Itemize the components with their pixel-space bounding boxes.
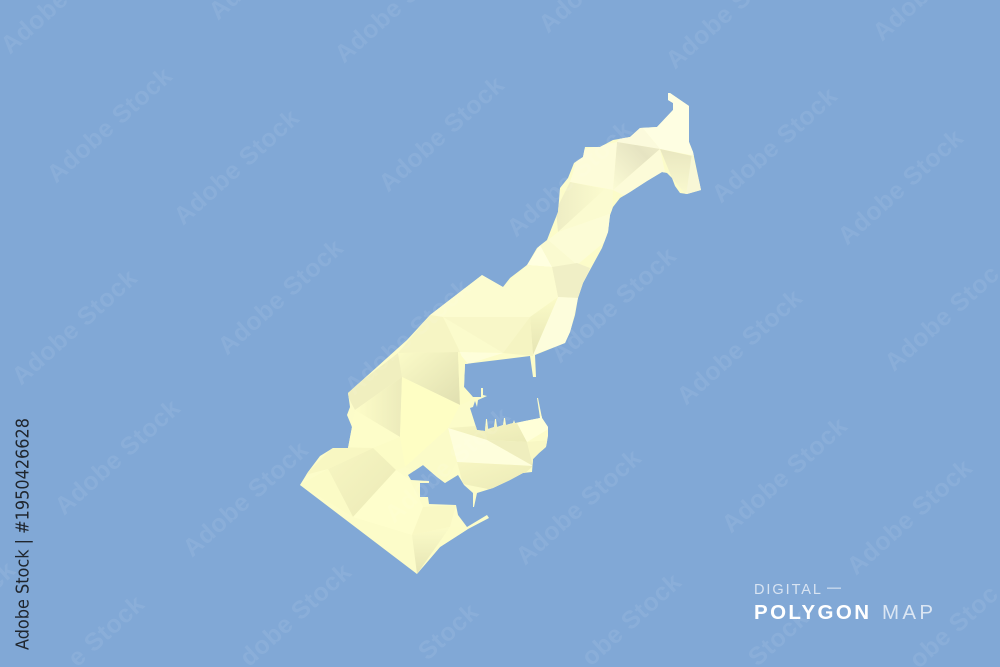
Adobe Stock watermarks: Adobe Stock (49, 394, 186, 520)
southern facets (300, 352, 550, 576)
Adobe Stock watermarks: Adobe Stock (510, 444, 647, 570)
Adobe Stock watermarks: Adobe Stock (671, 284, 808, 410)
Adobe Stock watermarks: Adobe Stock (706, 82, 843, 208)
Adobe Stock watermarks: Adobe Stock (373, 71, 510, 197)
caption line: polygon map (754, 601, 933, 624)
map silhouette (300, 93, 701, 574)
Adobe Stock watermarks: Adobe Stock (501, 116, 638, 242)
Adobe Stock watermarks: Adobe Stock (168, 104, 305, 230)
caption line: digital: DIGITAL (754, 582, 821, 598)
Adobe Stock watermarks: Adobe Stock (716, 412, 853, 538)
Adobe Stock watermarks: Adobe Stock (841, 454, 978, 580)
Adobe Stock watermarks: Adobe Stock (832, 124, 969, 250)
Adobe Stock watermarks: Adobe Stock (177, 436, 314, 562)
caption line: polygon map: POLYGON (754, 601, 869, 624)
Adobe Stock watermarks: Adobe Stock (6, 264, 143, 390)
Adobe Stock watermarks: Stock (413, 598, 484, 666)
caption: digital polygon map (754, 582, 933, 624)
Adobe Stock watermarks: Adobe Stock (41, 62, 178, 188)
caption line: polygon map: MAP (882, 601, 933, 624)
polygon map of Monaco (300, 90, 702, 576)
Adobe Stock watermarks: Adobe Stock (339, 274, 476, 400)
northern facets (430, 93, 701, 364)
Adobe Stock watermarks: Adobe Stock (212, 234, 349, 360)
stock id side text: Adobe Stock | #1950426628 (14, 418, 34, 650)
Adobe Stock watermarks: Adobe Stock (545, 242, 682, 368)
Adobe Stock watermarks: Adobe Stock (379, 402, 516, 528)
